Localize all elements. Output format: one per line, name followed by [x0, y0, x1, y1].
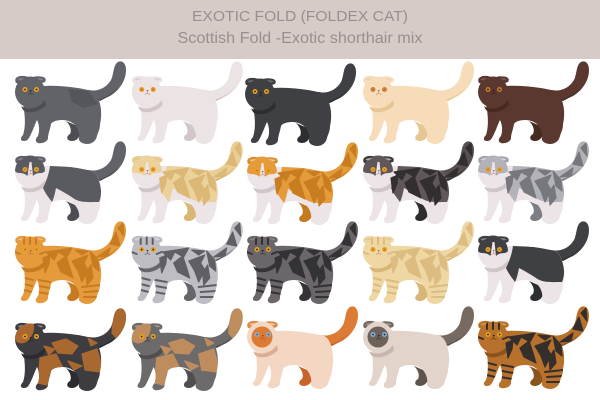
- cat: lilac white solid: [132, 61, 243, 144]
- cat: black and white bicolor: [478, 221, 589, 304]
- cat: cream tabby and white: [132, 141, 243, 224]
- cat: brown tabby: [478, 306, 589, 389]
- cat: cream solid: [363, 61, 474, 144]
- title: EXOTIC FOLD (FOLDEX CAT): [192, 8, 408, 25]
- cat: silver tabby and white: [478, 141, 589, 224]
- cat: blue solid: [15, 61, 126, 144]
- cat: red tabby and white: [247, 142, 358, 225]
- cat: blue and white bicolor: [15, 141, 126, 224]
- cat: flame point: [247, 306, 358, 389]
- subtitle: Scottish Fold -Exotic shorthair mix: [178, 30, 422, 47]
- header band: [0, 0, 600, 59]
- cat: blue tortoiseshell: [132, 308, 243, 391]
- cat: red tabby: [15, 221, 126, 304]
- cat: seal point: [363, 306, 474, 389]
- cat: cream tabby: [363, 221, 474, 304]
- cat: silver tabby: [132, 221, 243, 304]
- cat: black tabby: [247, 221, 358, 304]
- cat: black tortoiseshell: [15, 308, 126, 391]
- cat: black solid: [245, 63, 356, 146]
- cat: chocolate solid: [478, 61, 589, 144]
- cat: black smoke tabby and white: [363, 141, 474, 224]
